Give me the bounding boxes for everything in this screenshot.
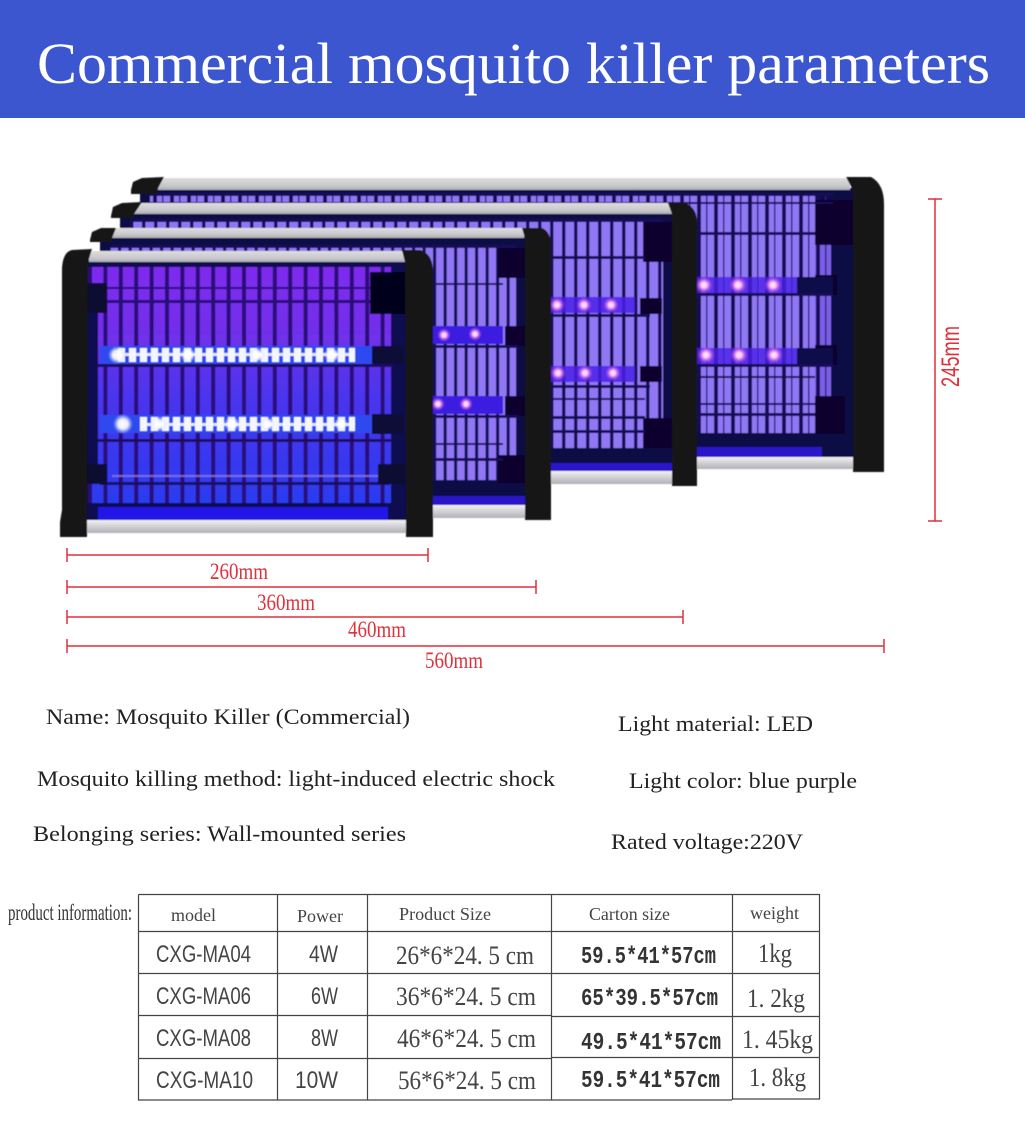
table row: CXG-MA04: 1kg <box>758 939 792 968</box>
dimension: width 260mm: 260mm <box>210 559 268 584</box>
spec: light color: Light color: blue purple <box>629 768 857 793</box>
product illustration: four mosquito killers by size <box>60 177 884 537</box>
table row: CXG-MA08: 49.5*41*57cm <box>581 1030 721 1057</box>
table header row <box>171 903 799 926</box>
dark brackets <box>370 272 406 314</box>
table header row: weight <box>750 903 799 923</box>
table row: CXG-MA06: 1. 2kg <box>747 984 805 1013</box>
glowing cage panel <box>88 267 391 503</box>
table row: CXG-MA06 <box>156 982 805 1013</box>
table row: CXG-MA10: 56*6*24. 5 cm <box>398 1066 536 1095</box>
spec: rated voltage: Rated voltage:220V <box>611 829 803 854</box>
dimension: height 245mm: 245mm <box>937 326 965 387</box>
table row: CXG-MA04 <box>156 939 792 971</box>
table row: CXG-MA04: 26*6*24. 5 cm <box>396 941 534 970</box>
table row: CXG-MA10: 10W <box>295 1067 338 1094</box>
table row: CXG-MA04: 59.5*41*57cm <box>581 944 716 971</box>
table row: CXG-MA04: CXG-MA04 <box>156 941 251 968</box>
unit: 260mm (front) <box>60 249 433 537</box>
table header row: Power <box>297 906 343 926</box>
unit: 460mm <box>111 202 697 486</box>
table row: CXG-MA06: 36*6*24. 5 cm <box>396 982 536 1011</box>
unit: 560mm (rear) <box>131 177 884 472</box>
dark side frame <box>87 303 98 483</box>
spec: light material: Light material: LED <box>618 711 813 736</box>
product information label: product information: <box>8 900 132 925</box>
table row: CXG-MA10 <box>156 1063 806 1095</box>
spec: name: Name: Mosquito Killer (Commercial) <box>46 704 410 729</box>
table row: CXG-MA08: 46*6*24. 5 cm <box>397 1024 536 1053</box>
aluminium top bar <box>89 251 405 262</box>
right black post <box>402 250 433 537</box>
title: Commercial mosquito killer parameters <box>37 31 990 96</box>
LED strip: lower <box>100 414 372 434</box>
title banner <box>0 0 1025 118</box>
product information table <box>138 894 820 1100</box>
table header row: Product Size <box>399 904 491 924</box>
table row: CXG-MA08: CXG-MA08 <box>156 1025 251 1052</box>
left black post <box>60 249 92 537</box>
table row: CXG-MA08: 8W <box>311 1025 338 1052</box>
spec: killing method: Mosquito killing method: light-induced electric shock <box>37 766 555 791</box>
table row: CXG-MA10: 1. 8kg <box>749 1063 806 1092</box>
table header row: Carton size <box>589 904 670 924</box>
table row: CXG-MA10: CXG-MA10 <box>156 1067 253 1094</box>
table row: CXG-MA06: 65*39.5*57cm <box>581 986 718 1013</box>
spec: series: Belonging series: Wall-mounted series <box>33 821 406 846</box>
dimension: width 560mm: 560mm <box>425 648 483 673</box>
specifications text block <box>33 704 857 854</box>
table header row: model <box>171 905 216 925</box>
dimension: width 460mm: 460mm <box>348 617 406 642</box>
table row: CXG-MA08 <box>156 1024 813 1057</box>
table row: CXG-MA08: 1. 45kg <box>742 1025 813 1054</box>
table row: CXG-MA04: 4W <box>309 941 338 968</box>
table row: CXG-MA06: 6W <box>311 983 338 1010</box>
table row: CXG-MA06: CXG-MA06 <box>156 983 251 1010</box>
aluminium bottom bar <box>87 520 407 533</box>
LED strip: upper <box>100 346 372 364</box>
dimension: width 360mm: 360mm <box>257 590 315 615</box>
blue floor light <box>98 507 388 520</box>
table row: CXG-MA10: 59.5*41*57cm <box>581 1068 720 1095</box>
unit: 360mm <box>90 228 551 520</box>
